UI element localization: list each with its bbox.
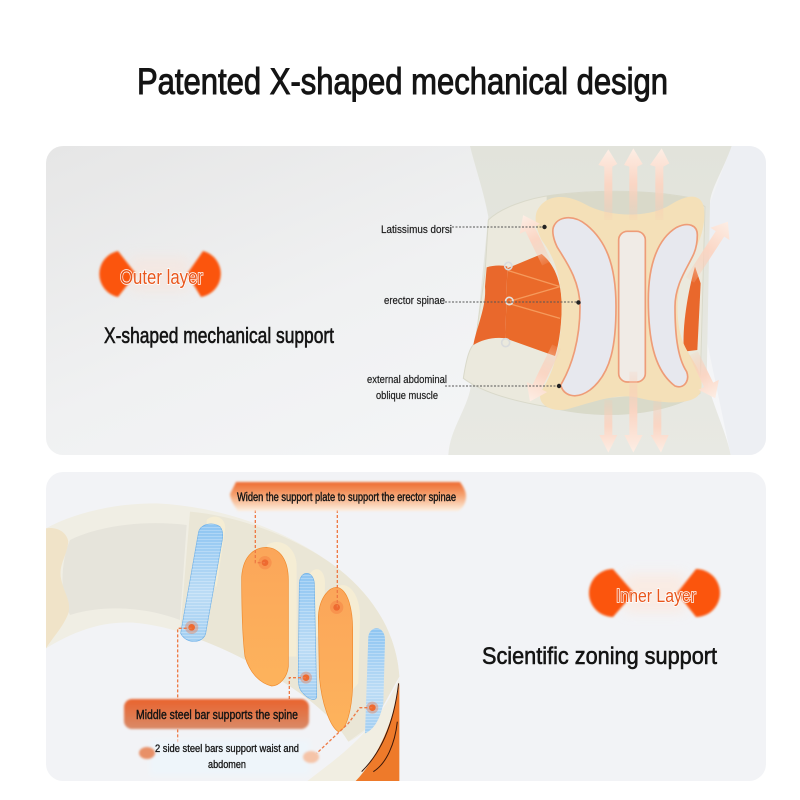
subheading: Scientific zoning support: Scientific zoning support <box>482 643 717 670</box>
panel: inner layer <box>46 472 766 782</box>
label: side steel bars: 2 side steel bars support waist and <box>155 743 299 755</box>
orange strap corner <box>355 683 399 782</box>
label banner: middle steel bar <box>124 699 309 729</box>
callout: erector spinae <box>384 295 581 307</box>
arrows <box>513 148 737 406</box>
title: Patented X-shaped mechanical design <box>137 61 668 102</box>
badge: Outer layer <box>99 251 221 297</box>
center plate window <box>619 231 645 382</box>
panel: outer layer <box>46 146 793 455</box>
middle steel bar <box>298 573 317 699</box>
dashed leader lines <box>178 510 372 753</box>
cream pads behind plates <box>207 517 225 587</box>
badge: Inner Layer <box>589 569 720 617</box>
subheading: X-shaped mechanical support: X-shaped mechanical support <box>104 323 334 348</box>
side steel bar 2 <box>365 628 385 733</box>
label banner: middle steel bar: Middle steel bar supports the spine <box>136 708 298 722</box>
callout: Latissimus dorsi <box>381 224 547 236</box>
orange strap left <box>473 254 562 356</box>
label: side steel bars <box>139 740 319 775</box>
markers <box>185 556 378 714</box>
left plate window <box>553 218 616 396</box>
orange strap right <box>684 267 701 352</box>
cream plate <box>536 197 704 410</box>
callout: Latissimus dorsi: Latissimus dorsi <box>381 224 452 236</box>
belt top band <box>546 192 685 214</box>
callout: erector spinae: erector spinae <box>384 295 445 307</box>
wide plate 1 <box>242 547 288 686</box>
right plate window <box>648 225 697 387</box>
callout: external abdominal oblique muscle: external abdominal <box>367 374 447 386</box>
belt band <box>46 503 399 742</box>
belt bottom band <box>564 396 680 414</box>
badge: Inner Layer: Inner Layer <box>616 586 696 606</box>
front band <box>307 678 399 782</box>
badge: Outer layer: Outer layer <box>120 266 203 289</box>
side steel bar 1 <box>181 524 223 641</box>
image: open belt with support plates <box>46 503 399 782</box>
label: side steel bars: abdomen <box>208 759 246 771</box>
label banner: widen the support plate <box>230 482 466 511</box>
image: waist belt on mannequin <box>448 146 793 455</box>
wide plate 2 <box>318 587 353 732</box>
callout: external abdominal oblique muscle <box>367 374 561 402</box>
callout: external abdominal oblique muscle: oblique muscle <box>376 390 438 402</box>
label banner: widen the support plate: Widen the support plate to support the erector spinae <box>237 492 456 504</box>
